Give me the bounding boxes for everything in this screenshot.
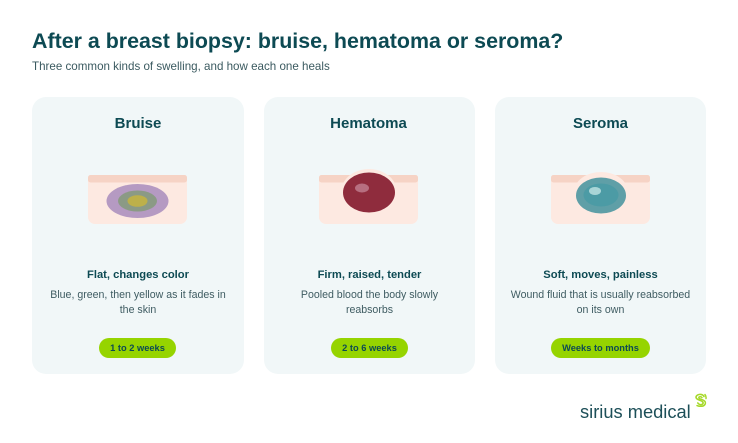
duration pill: hematoma: 2 to 6 weeks xyxy=(342,343,397,353)
description: hematoma: reabsorbs xyxy=(346,304,393,316)
icon: seroma on skin xyxy=(551,172,650,224)
description: bruise: the skin xyxy=(120,304,156,316)
description: hematoma: Pooled blood the body slowly xyxy=(301,288,438,300)
panel: hematoma xyxy=(264,97,475,374)
description: seroma: Wound fluid that is usually reabsorbed xyxy=(511,288,690,300)
title: After a breast biopsy: bruise, hematoma or seroma? xyxy=(32,29,563,53)
duration pill: hematoma xyxy=(331,338,408,358)
duration pill: bruise: 1 to 2 weeks xyxy=(110,343,165,353)
key trait: hematoma: Firm, raised, tender xyxy=(318,269,421,281)
heading: bruise: Bruise xyxy=(115,115,161,132)
duration pill: seroma: Weeks to months xyxy=(562,343,639,353)
description: bruise: Blue, green, then yellow as it fades in xyxy=(50,288,226,300)
logo wordmark: sirius medical xyxy=(580,401,691,422)
logo icon: green spiral xyxy=(695,394,707,407)
subtitle: Three common kinds of swelling, and how each one heals xyxy=(32,60,330,73)
description: bruise xyxy=(50,288,226,316)
description: seroma: on its own xyxy=(577,304,624,316)
icon: bruise on skin xyxy=(88,175,187,224)
icon: hematoma on skin xyxy=(319,169,418,224)
heading: seroma: Seroma xyxy=(573,115,628,132)
description: seroma xyxy=(510,288,690,316)
heading: hematoma: Hematoma xyxy=(330,115,407,132)
key trait: bruise: Flat, changes color xyxy=(87,269,189,281)
key trait: seroma: Soft, moves, painless xyxy=(543,269,658,281)
panel: seroma xyxy=(495,97,706,374)
description: hematoma xyxy=(301,288,438,316)
duration pill: bruise xyxy=(99,338,176,358)
panel: bruise xyxy=(32,97,244,374)
duration pill: seroma xyxy=(551,338,650,358)
logo: sirius medical xyxy=(580,394,707,422)
